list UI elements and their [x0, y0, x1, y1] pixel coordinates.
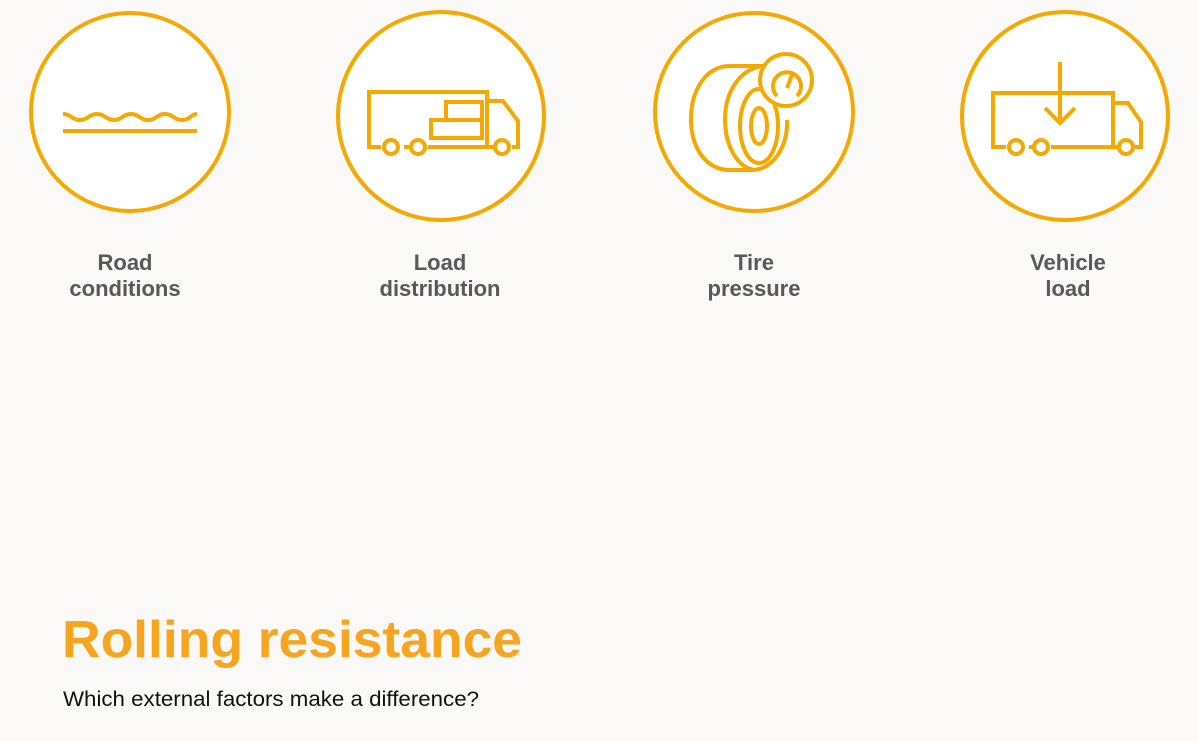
icon: load distribution truck: [338, 12, 544, 220]
labels: Road: [98, 250, 152, 275]
subtitle: Which external factors make a difference?: [63, 688, 479, 711]
labels: load: [1045, 276, 1091, 301]
title: Rolling resistance: [62, 611, 522, 669]
icon: vehicle load truck: [962, 12, 1168, 220]
labels: Vehicle: [1030, 250, 1106, 275]
labels: conditions: [69, 276, 181, 301]
labels: Tire: [734, 250, 774, 275]
labels: Load: [414, 250, 466, 275]
icon: tire pressure: [655, 13, 853, 211]
labels: pressure: [708, 276, 800, 301]
icon: road conditions: [31, 13, 229, 211]
labels: distribution: [380, 276, 500, 301]
labels: [69, 250, 1106, 301]
